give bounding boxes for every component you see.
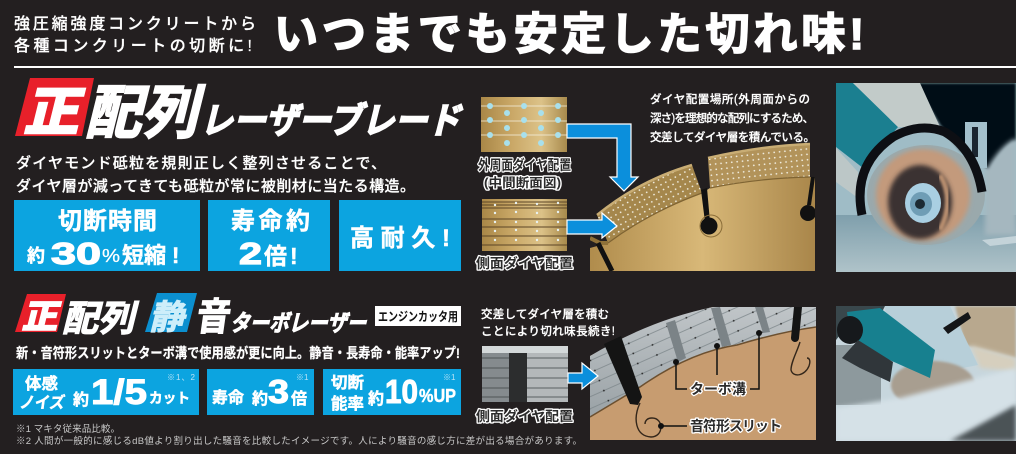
callout: durable: 高耐久! [350,225,450,252]
leader lines [662,333,759,426]
blade segment right [708,144,810,188]
footnotes: ※1 マキタ従来品比較。 [16,423,120,435]
callout: cutting time: 約 [27,246,45,266]
slit centre with keyhole [700,188,718,234]
sub heading: 強圧縮強度コンクリートから [14,15,256,33]
callout: cutting time: 短縮 [122,243,166,268]
badge: 静 blue: 静 [147,299,191,337]
callout: efficiency: 能率 [331,394,364,413]
turbo grooves [666,307,770,362]
callout: life: 倍 [264,243,287,269]
annotation: diamond position: 深さ)を理想的な配列にするため、 [650,111,814,125]
callout: noise: 1/5 [91,373,147,412]
badge: 正 red: 正 [21,84,90,142]
callout: noise: ※1、2 [167,373,196,382]
callout: life x3: 約 [252,390,268,408]
callout: noise [13,369,199,415]
callout: noise: 約 [73,391,89,409]
annotation: diamond position [650,92,815,144]
description: ダイヤ層が減ってきても砥粒が常に被削材に当たる構造。 [16,177,415,195]
arrow: to blade side [567,213,617,238]
label: outer diamond layout: (中間断面図) [484,175,561,190]
heading text: レーザーブレード: レーザーブレード [198,101,468,141]
heading text: 配列: 配列 [60,299,142,339]
label: outer diamond layout [478,157,571,190]
callout: life x3: 倍 [291,390,307,408]
steel band [590,307,816,417]
slit right with keyhole [800,177,816,221]
callout: life [208,200,330,271]
label: turbo groove: ターボ溝 [690,381,746,397]
arrow: to blade top [567,124,638,191]
annotation: crossing layers [481,307,615,338]
arrow: to turbo blade [568,363,598,389]
badge: 正 red small: 正 [20,299,64,336]
diagram: side diamond layout [482,199,567,251]
description: ダイヤモンド砥粒を規則正しく整列させることで、 [16,154,386,172]
notch slit right [795,307,798,338]
slit left [598,243,612,271]
callout: life x3: ※1 [296,373,309,382]
footnotes [16,423,582,447]
diagram: outer diamond layout [481,97,567,152]
sub heading [14,15,256,55]
blade segment left [597,165,702,243]
description [16,154,415,195]
diagram: turbo blade [590,307,816,440]
description: 新・音符形スリットとターボ溝で使用感が更に向上。静音・長寿命・能率アップ! [16,345,460,361]
callout: life: 2 [239,236,262,271]
callout: efficiency: 10 [385,373,418,410]
footnotes: ※2 人間が一般的に感じるdB値より割り出した騒音を比較したイメージです。人により騒音の感じ方に差が出る場合があります。 [16,435,582,447]
callout: cutting time: 切断時間 [58,208,157,235]
callout: noise: 体感 [25,374,58,393]
photo: hand grinder cutting [836,83,1016,272]
heading text: ターボレーザー: ターボレーザー [229,310,371,336]
annotation: crossing layers: ことにより切れ味長続き! [481,324,615,338]
callout: life x3 [207,369,314,415]
callout: life x3: 3 [268,373,289,410]
hook right [791,342,810,375]
callout: efficiency: 約 [368,390,384,408]
callout: efficiency [323,369,461,415]
callout: efficiency: %UP [419,386,456,406]
callout: durable [339,200,461,271]
callout: life x3: 寿命 [212,389,244,407]
sub heading: 各種コンクリートの切断に! [14,37,252,55]
callout: noise: ノイズ [18,393,66,412]
callout: life: 寿命約 [231,208,310,235]
notch slit left [604,336,642,405]
annotation: diamond position: ダイヤ配置場所(外周面からの [650,92,810,106]
heading text: 配列: 配列 [82,82,210,146]
callout: cutting time: % [102,246,120,266]
annotation: crossing layers: 交差してダイヤ層を積む [481,307,609,321]
heading text: 音: 音 [194,296,234,339]
heading: silent turbo laser [15,293,461,339]
label: outer diamond layout: 外周面ダイヤ配置 [478,157,571,173]
label: note slit: 音符形スリット [690,418,782,434]
diagram: gold blade [590,144,816,271]
hook left [636,403,661,437]
photo: engine cutter [836,306,1016,441]
annotation: diamond position: 交差してダイヤ層を積んでいる。 [650,130,815,144]
callout: life: ! [290,243,298,269]
callout: cutting time: ! [172,243,179,268]
tag: engine cutter [375,306,461,326]
callout: noise: カット [149,390,190,406]
label: side diamond layout: 側面ダイヤ配置 [476,408,573,424]
callout: cutting time: 30 [51,236,101,271]
main title: いつまでも安定した切れ味! [274,10,864,59]
callout: efficiency: 切断 [331,374,364,392]
heading: laser blade [15,78,468,146]
callout: efficiency: ※1 [443,373,456,382]
diagram: steel side layout [482,346,568,402]
label: side diamond layout: 側面ダイヤ配置 [476,255,573,271]
callout: cutting time [14,200,200,271]
tag: engine cutter: エンジンカッタ用 [378,310,458,324]
